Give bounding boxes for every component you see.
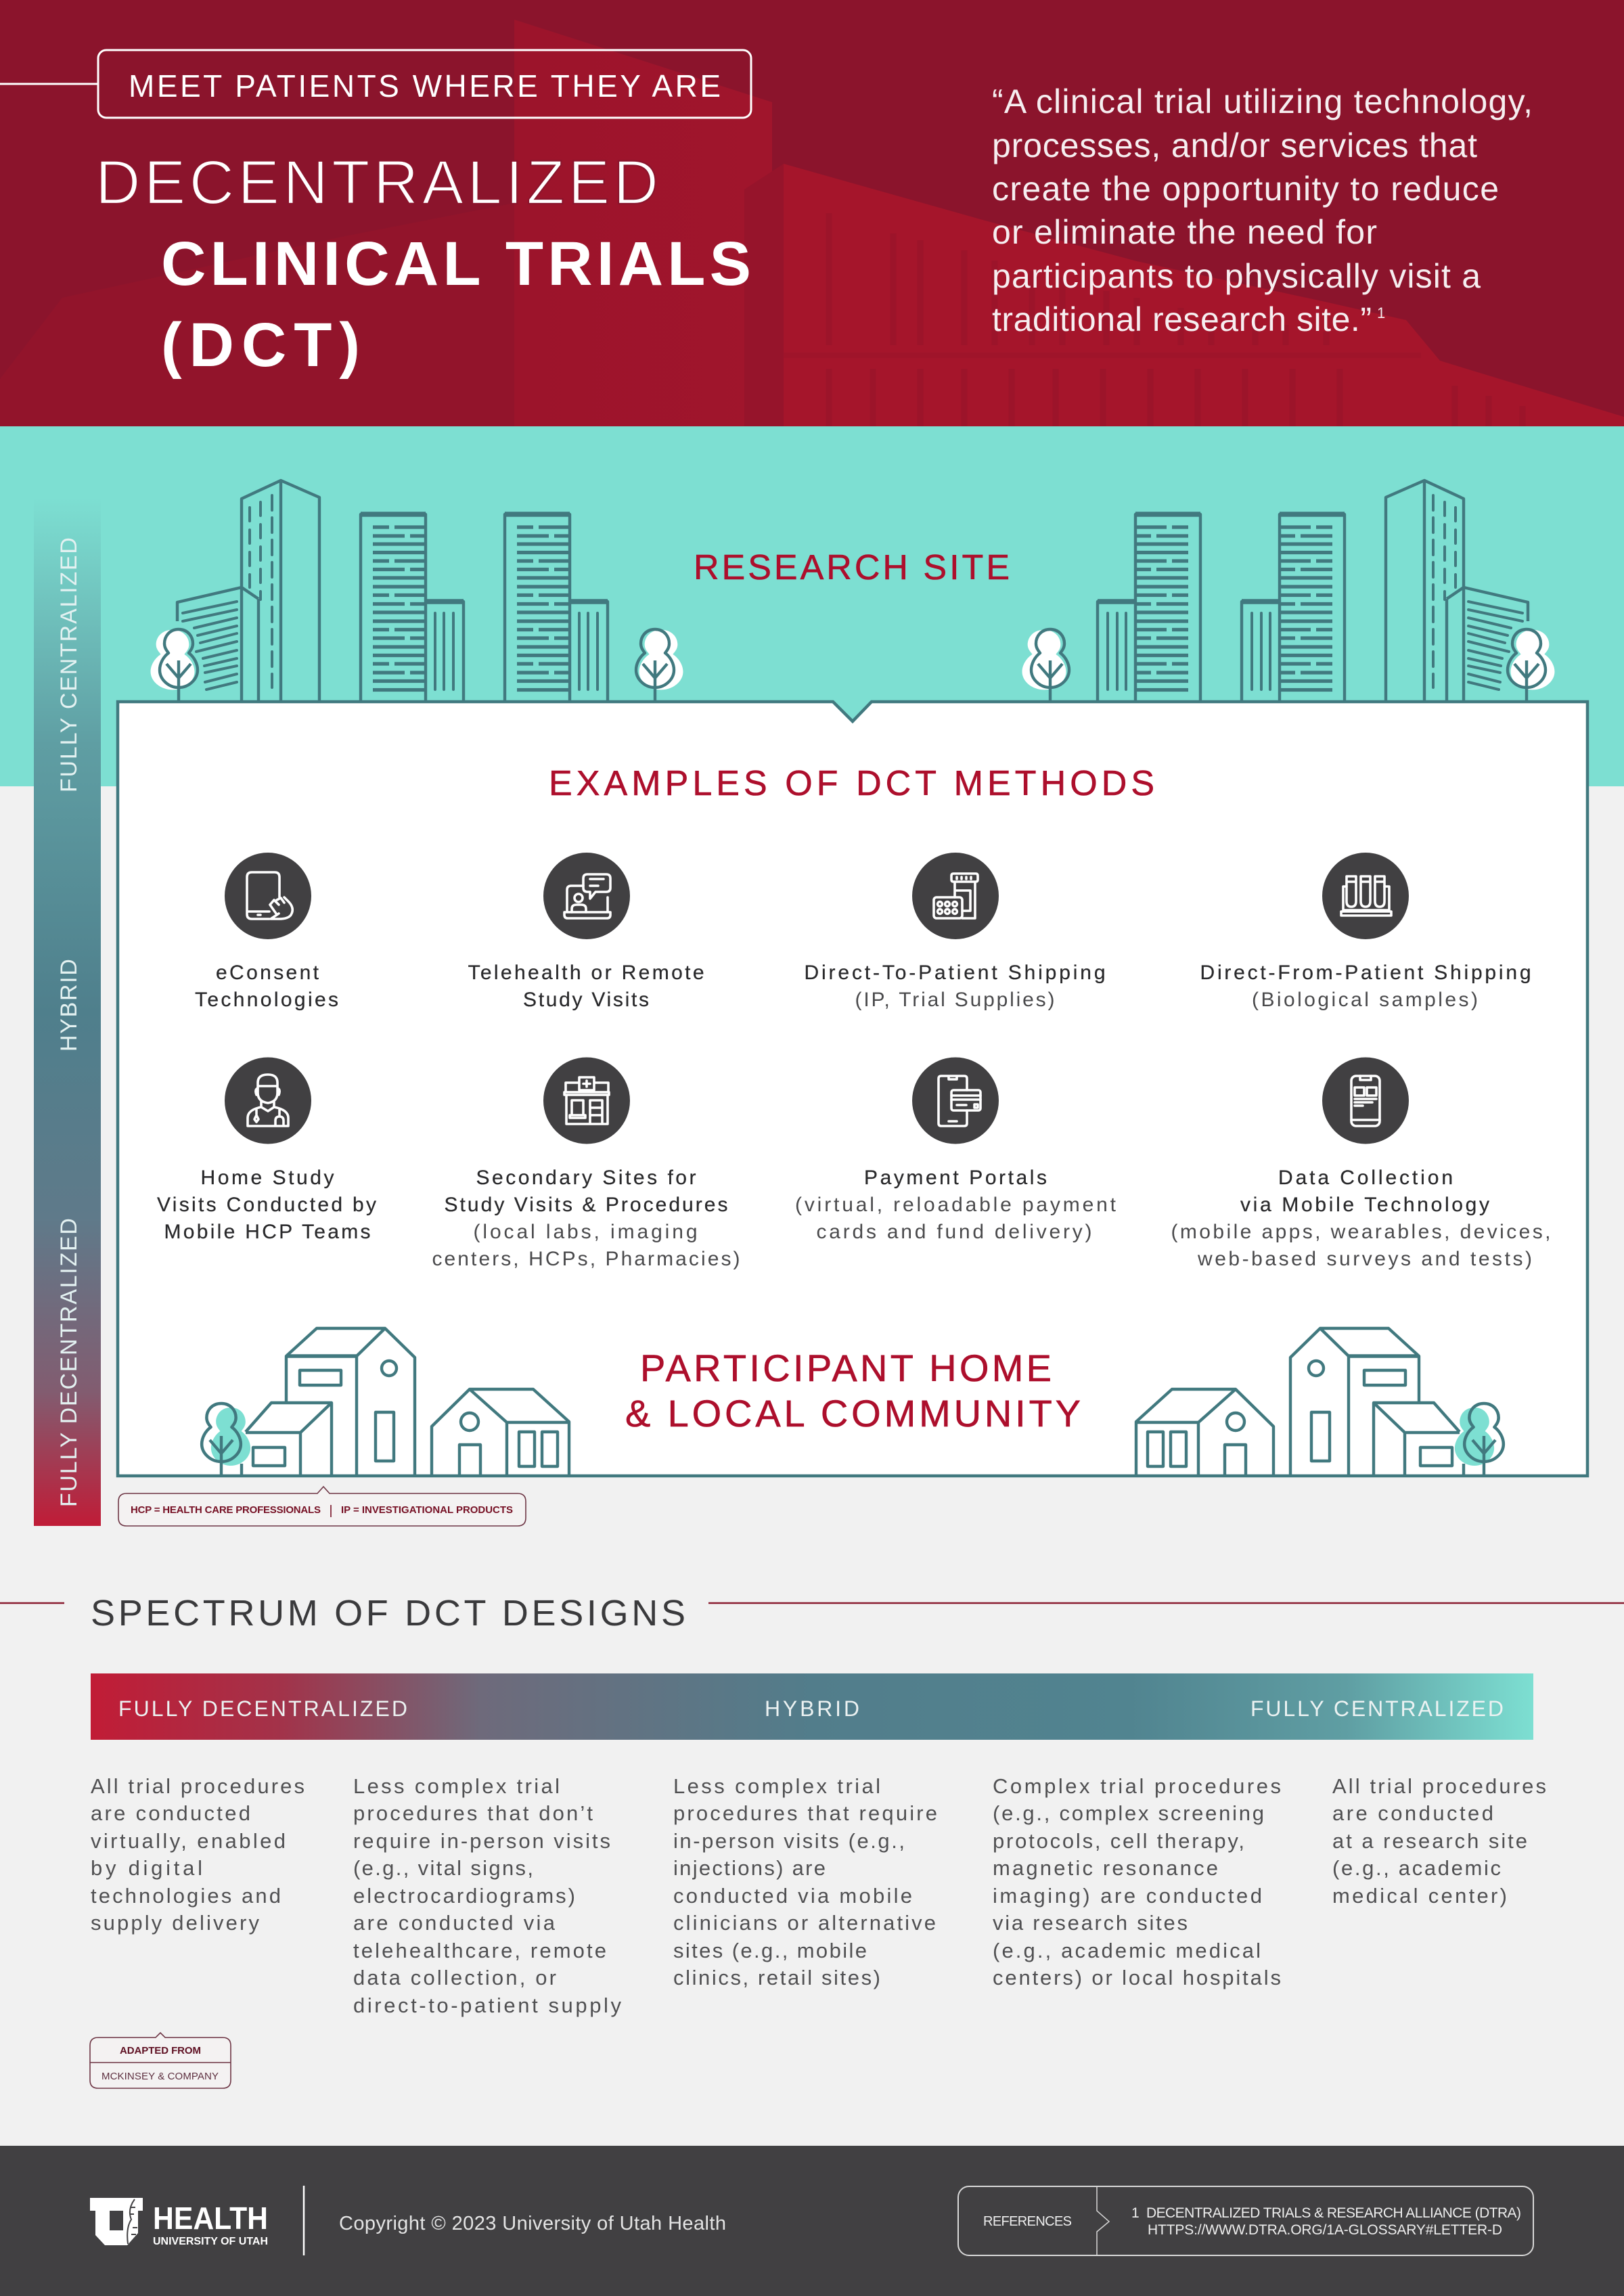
column: complex trial procedures: via research sites: [993, 1911, 1188, 1935]
teal research site band: [0, 426, 1624, 786]
icon: small front house: [242, 1403, 332, 1476]
heading: examples of DCT methods: EXAMPLES OF DCT METHODS: [549, 764, 1154, 803]
method: data collection: (mobile apps, wearables, devices,: [1171, 1221, 1551, 1243]
spectrum side bar: FULLY DECENTRALIZED: [56, 1218, 82, 1507]
definition quote: “A clinical trial utilizing technology,: [992, 83, 1533, 120]
heading: research site: RESEARCH SITE: [694, 548, 1010, 587]
source callout: adapted from: ADAPTED FROM: [120, 2045, 201, 2056]
column: less complex, no in-person: (e.g., vital signs,: [353, 1856, 533, 1880]
column: fully decentralized: virtually, enabled: [91, 1829, 286, 1853]
research site buildings, left: [151, 480, 683, 702]
heading: participant home and local community: PARTICIPANT HOME: [640, 1347, 1052, 1389]
abbreviation footnote callout: IP = INVESTIGATIONAL PRODUCTS: [341, 1504, 513, 1516]
column: complex trial procedures: (e.g., complex screening: [993, 1801, 1264, 1825]
icon: white-backed tree: [151, 629, 198, 702]
column: fully centralized: All trial procedures: [1332, 1774, 1546, 1798]
definition quote: participants to physically visit a: [992, 257, 1481, 295]
University of Utah Health logo: [90, 2198, 268, 2247]
method: secondary sites: Study Visits & Procedures: [444, 1194, 728, 1216]
column: fully decentralized: All trial procedures: [91, 1774, 304, 1798]
method: secondary sites: centers, HCPs, Pharmacies): [432, 1248, 740, 1270]
column: fully decentralized: [91, 1774, 304, 1935]
participant home illustration, left: [202, 1328, 569, 1476]
method: telehealth: Study Visits: [523, 989, 649, 1011]
section heading: spectrum of DCT designs: SPECTRUM OF DCT DESIGNS: [91, 1593, 685, 1634]
column: less complex, no in-person: direct-to-patient supply: [353, 1994, 621, 2017]
column: complex trial procedures: centers) or local hospitals: [993, 1966, 1281, 1989]
method: data collection: Data Collection: [1278, 1167, 1453, 1189]
University of Utah Health logo: HEALTH: [153, 2201, 268, 2236]
method: secondary sites: Secondary Sites for: [476, 1167, 696, 1189]
column: less complex, no in-person: electrocardiograms): [353, 1884, 575, 1908]
method: direct-to-patient shipping: Direct-To-Patient Shipping: [804, 962, 1106, 984]
heading: participant home and local community: & LOCAL COMMUNITY: [625, 1392, 1081, 1435]
column: fully decentralized: by digital: [91, 1856, 202, 1880]
column: fully decentralized: supply delivery: [91, 1911, 260, 1935]
heading: participant home and local community: [625, 1347, 1081, 1435]
column: less complex, no in-person: procedures that don’t: [353, 1801, 593, 1825]
column: fully decentralized: are conducted: [91, 1801, 250, 1825]
column: less complex, in-person: Less complex trial: [673, 1774, 880, 1798]
method: eConsent: eConsent: [216, 962, 319, 984]
footer band: [0, 2146, 1624, 2296]
column: less complex, in-person: procedures that require: [673, 1801, 937, 1825]
participant home illustration, right: [1136, 1328, 1504, 1476]
references box: REFERENCES: [983, 2214, 1072, 2229]
column: less complex, in-person: sites (e.g., mobile: [673, 1939, 867, 1962]
header panel with building silhouette: [0, 0, 1624, 433]
icon: striped tower one: [361, 514, 464, 702]
footer divider and copyright: Copyright © 2023 University of Utah Health: [339, 2213, 726, 2234]
tagline badge: MEET PATIENTS WHERE THEY ARE: [129, 68, 721, 104]
abbreviation footnote callout: HCP = HEALTH CARE PROFESSIONALS: [131, 1504, 321, 1516]
column: complex trial procedures: (e.g., academic medical: [993, 1939, 1261, 1962]
abbreviation footnote callout: [118, 1487, 526, 1526]
method: direct-from-patient shipping: [1200, 853, 1531, 1011]
title: DECENTRALIZED: [95, 148, 658, 217]
column: complex trial procedures: [993, 1774, 1281, 1989]
references box: DECENTRALIZED TRIALS & RESEARCH ALLIANCE (DTRA): [1146, 2205, 1521, 2221]
panel: examples of DCT methods: [118, 702, 1587, 1476]
column: less complex, in-person: in-person visits (e.g.,: [673, 1829, 905, 1853]
icon: tall tower: [242, 480, 319, 702]
definition quote: processes, and/or services that: [992, 127, 1477, 164]
column: complex trial procedures: imaging) are conducted: [993, 1884, 1262, 1908]
column: less complex, no in-person: telehealthcare, remote: [353, 1939, 606, 1962]
title: CLINICAL TRIALS: [161, 229, 751, 298]
column: complex trial procedures: Complex trial procedures: [993, 1774, 1281, 1798]
column: less complex, no in-person: require in-person visits: [353, 1829, 610, 1853]
definition quote: create the opportunity to reduce: [992, 170, 1499, 208]
method: payment portals: Payment Portals: [864, 1167, 1047, 1189]
method: direct-to-patient shipping: (IP, Trial Supplies): [855, 989, 1054, 1011]
method: direct-to-patient shipping: [804, 853, 1106, 1011]
icon: tall house: [286, 1328, 415, 1476]
column: less complex, in-person: conducted via mobile: [673, 1884, 912, 1908]
source callout: adapted from: [90, 2033, 231, 2088]
method: payment portals: cards and fund delivery): [816, 1221, 1092, 1243]
column: complex trial procedures: protocols, cell therapy,: [993, 1829, 1244, 1853]
method: payment portals: [795, 1057, 1116, 1243]
column: fully centralized: [1332, 1774, 1546, 1908]
column: less complex, no in-person: data collection, or: [353, 1966, 556, 1989]
method: telehealth: Telehealth or Remote: [468, 962, 704, 984]
tagline badge: [0, 50, 751, 118]
column: fully centralized: medical center): [1332, 1884, 1507, 1908]
definition quote: or eliminate the need for: [992, 213, 1377, 251]
column: fully centralized: (e.g., academic: [1332, 1856, 1501, 1880]
icon: gabled house: [432, 1389, 569, 1476]
research site buildings, right: [1022, 480, 1554, 702]
references box: 1: [1131, 2205, 1140, 2221]
method: data collection: via Mobile Technology: [1240, 1194, 1489, 1216]
method: direct-from-patient shipping: (Biological samples): [1252, 989, 1478, 1011]
method: data collection: web-based surveys and tests): [1197, 1248, 1532, 1270]
spectrum side bar: FULLY CENTRALIZED: [56, 537, 82, 792]
column: fully decentralized: technologies and: [91, 1884, 281, 1908]
method: eConsent: [195, 853, 338, 1011]
icon: teal tree: [202, 1403, 250, 1476]
column: less complex, in-person: clinicians or alternative: [673, 1911, 936, 1935]
title: [95, 148, 751, 380]
method: telehealth: [468, 853, 704, 1011]
method: data collection: [1171, 1057, 1551, 1270]
definition quote: [992, 83, 1533, 338]
method: eConsent: Technologies: [195, 989, 338, 1011]
column: less complex, in-person: clinics, retail sites): [673, 1966, 880, 1989]
column: less complex, no in-person: Less complex trial: [353, 1774, 560, 1798]
method: secondary sites: (local labs, imaging: [474, 1221, 697, 1243]
method: direct-from-patient shipping: Direct-From-Patient Shipping: [1200, 962, 1531, 984]
method: home study visits: Home Study: [200, 1167, 334, 1189]
column: fully centralized: are conducted: [1332, 1801, 1493, 1825]
icon: low angled building: [177, 587, 258, 702]
University of Utah Health logo: UNIVERSITY OF UTAH: [153, 2236, 268, 2247]
method: home study visits: Visits Conducted by: [157, 1194, 376, 1216]
spectrum gradient bar: FULLY CENTRALIZED: [1250, 1696, 1504, 1721]
definition quote: traditional research site.”: [992, 300, 1372, 338]
column: less complex, no in-person: [353, 1774, 621, 2017]
column: complex trial procedures: magnetic resonance: [993, 1856, 1218, 1880]
definition quote: 1: [1377, 305, 1385, 321]
references box: HTTPS://WWW.DTRA.ORG/1A-GLOSSARY#LETTER-D: [1148, 2222, 1502, 2238]
method: home study visits: [157, 1057, 376, 1243]
icon: striped tower two: [505, 514, 608, 702]
method: payment portals: (virtual, reloadable payment: [795, 1194, 1116, 1216]
spectrum gradient bar: HYBRID: [765, 1696, 859, 1721]
spectrum side bar: [34, 497, 101, 1526]
spectrum side bar: HYBRID: [56, 959, 82, 1052]
references box: [958, 2186, 1533, 2255]
method: home study visits: Mobile HCP Teams: [164, 1221, 371, 1243]
column: less complex, in-person: [673, 1774, 937, 1989]
spectrum gradient bar: FULLY DECENTRALIZED: [118, 1696, 407, 1721]
column: fully centralized: at a research site: [1332, 1829, 1527, 1853]
method: secondary sites: [432, 1057, 740, 1270]
title: (DCT): [161, 311, 360, 380]
icon: second white-backed tree: [636, 629, 683, 702]
column: less complex, no in-person: are conducted via: [353, 1911, 556, 1935]
source callout: adapted from: MCKINSEY & COMPANY: [102, 2071, 219, 2082]
spectrum gradient bar: [91, 1673, 1533, 1740]
column: less complex, in-person: injections) are: [673, 1856, 826, 1880]
